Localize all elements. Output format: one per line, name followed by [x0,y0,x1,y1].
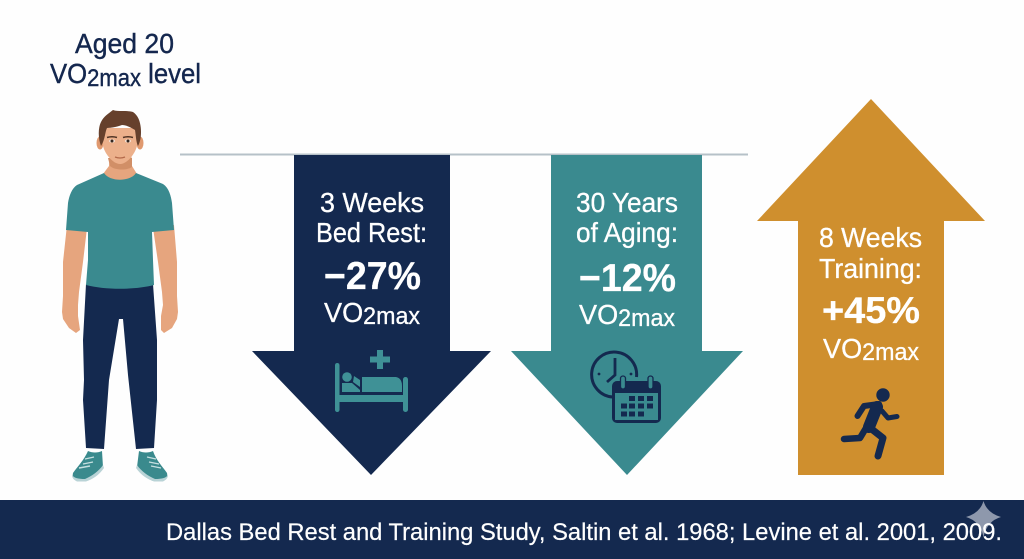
face [103,128,137,164]
text: training: 8 Weeks [819,222,922,253]
panel: training arrow [757,99,985,475]
heading: Aged 20 VO2max level: Aged 20 [75,28,174,59]
up arrow [757,99,985,475]
text: bed rest: VO [324,297,364,328]
heading: Aged 20 VO2max level: VO [50,58,90,89]
text: bed rest: 3 Weeks [320,187,424,218]
text: aging [576,187,678,332]
text: bed rest: Bed Rest: [316,217,427,248]
panel: aging arrow [511,155,743,475]
text: bed rest: 2max [363,303,420,330]
citation text: Dallas Bed Rest and Training Study, Saltin et al. 1968; Levine et al. 2001, 2009. [166,519,1002,546]
down arrow [511,155,743,475]
trousers [83,284,157,449]
right shoe [137,451,167,481]
footer: citation bar [0,500,1024,559]
text: training [819,222,922,366]
panel: bed rest arrow [252,155,491,475]
heading: Aged 20 VO2max level: level [141,58,201,89]
icon: hospital bed [335,350,408,412]
t-shirt [66,173,174,289]
text: aging: of Aging: [576,217,678,248]
text: aging: −12% [579,257,676,300]
hair [99,110,141,146]
icon: clock and calendar [592,352,661,423]
left shoe [73,451,103,481]
icon: runner [844,388,897,456]
down arrow [252,155,491,475]
text: aging: 2max [618,305,675,332]
text: training: 2max [862,339,919,366]
text: training: VO [823,333,863,364]
icon: sparkle watermark [966,501,1001,537]
heading: Aged 20 VO2max level: 2max [87,65,141,92]
text: bed rest: −27% [324,255,421,298]
neck [103,150,137,184]
ears [96,136,104,150]
left arm [62,225,87,333]
text: bed rest [316,187,427,330]
baseline: aged 20 reference level [180,154,748,156]
eyes and brows [107,136,133,138]
text: training: +45% [822,290,920,331]
heading: Aged 20 VO2max level [50,28,201,92]
right arm [153,225,178,333]
figure: young man aged 20 [62,110,178,482]
text: training: Training: [819,253,922,284]
text: aging: 30 Years [576,187,678,218]
text: aging: VO [579,299,619,330]
